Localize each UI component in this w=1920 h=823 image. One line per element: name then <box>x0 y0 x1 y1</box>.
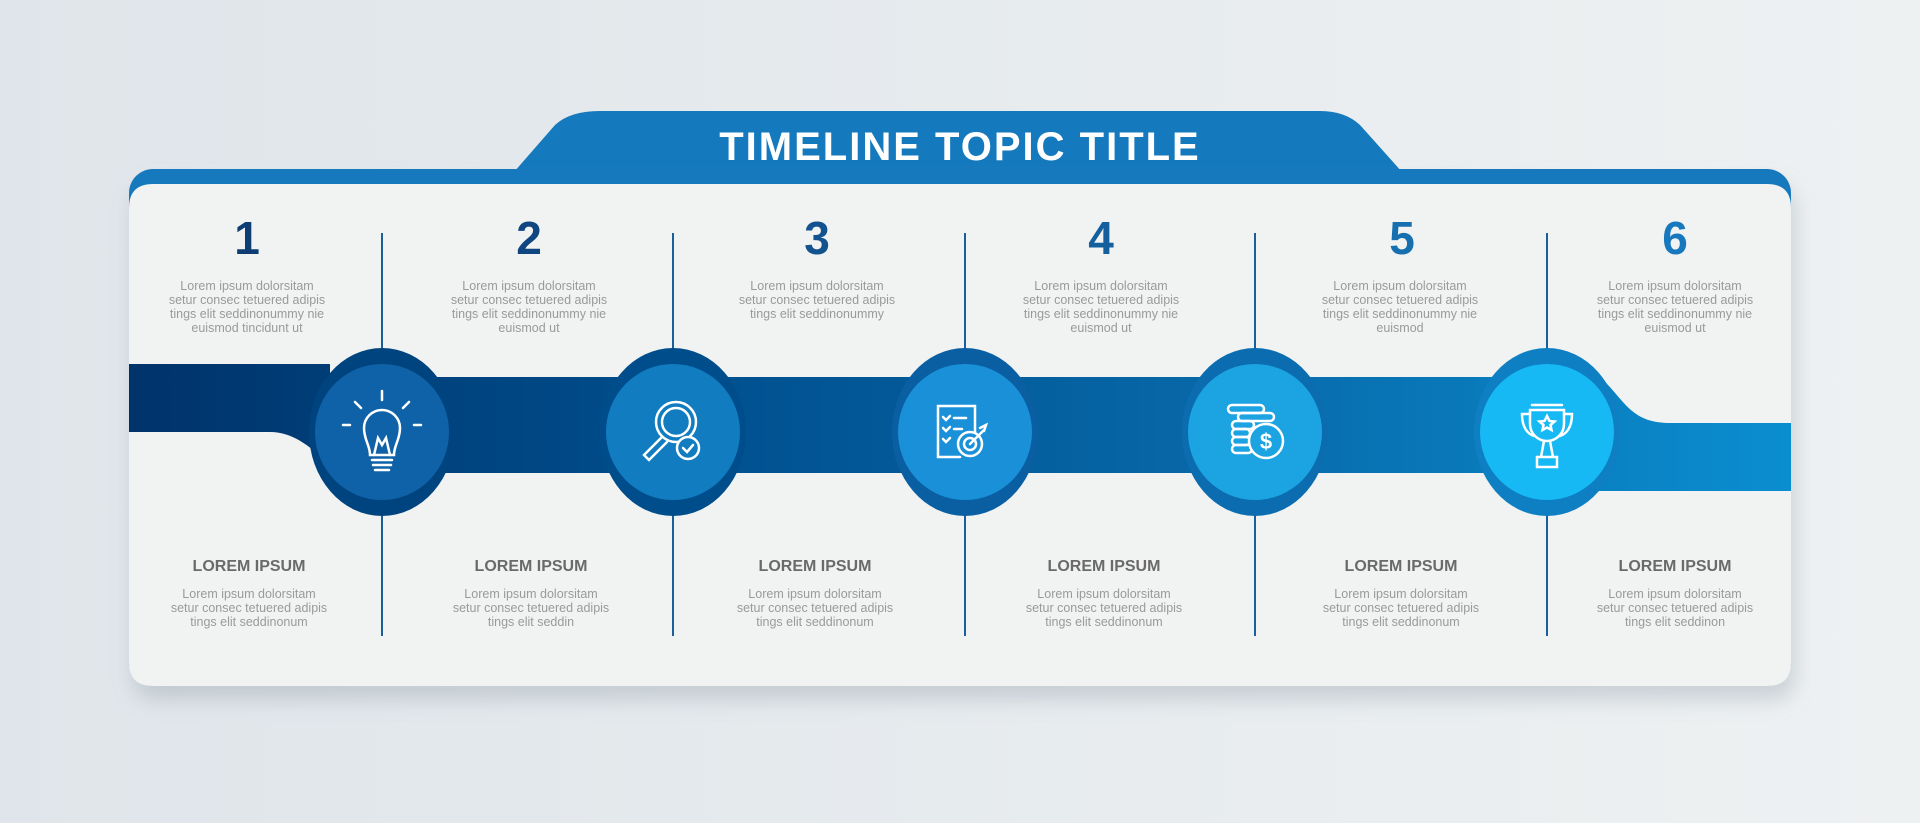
bottom paragraphs: setur consec tetuered adipis <box>1026 601 1182 615</box>
top paragraphs: Lorem ipsum dolorsitam <box>1608 279 1742 293</box>
bottom paragraphs: tings elit seddinonum <box>190 615 308 629</box>
top paragraphs: euismod <box>1376 321 1424 335</box>
top paragraphs: Lorem ipsum dolorsitam <box>1034 279 1168 293</box>
top paragraphs: Lorem ipsum dolorsitam <box>1333 279 1467 293</box>
numbers: 2 <box>516 212 542 264</box>
bottom paragraphs: setur consec tetuered adipis <box>1597 601 1753 615</box>
icon: magnifier check <box>644 402 699 460</box>
step 5 circle: trophy <box>1474 348 1620 516</box>
bottom headings: LOREM IPSUM <box>475 558 587 575</box>
numbers <box>234 212 1688 264</box>
top paragraphs: euismod ut <box>1644 321 1706 335</box>
card <box>129 169 1791 686</box>
bottom headings: LOREM IPSUM <box>1619 558 1731 575</box>
top paragraphs: Lorem ipsum dolorsitam <box>750 279 884 293</box>
icon: coins <box>1228 405 1283 458</box>
bottom headings: LOREM IPSUM <box>759 558 871 575</box>
top paragraphs: tings elit seddinonummy <box>750 307 885 321</box>
bottom paragraphs: tings elit seddinonum <box>1342 615 1460 629</box>
icon: checklist target <box>938 406 986 457</box>
top paragraphs: tings elit seddinonummy nie <box>452 307 606 321</box>
top paragraphs: setur consec tetuered adipis <box>1023 293 1179 307</box>
top paragraphs: setur consec tetuered adipis <box>451 293 607 307</box>
icon: trophy <box>1522 405 1572 467</box>
top paragraphs: setur consec tetuered adipis <box>739 293 895 307</box>
icon: lightbulb <box>343 391 421 470</box>
top paragraphs: Lorem ipsum dolorsitam <box>462 279 596 293</box>
bottom headings: LOREM IPSUM <box>1345 558 1457 575</box>
bottom paragraphs: Lorem ipsum dolorsitam <box>748 587 882 601</box>
top paragraphs: tings elit seddinonummy nie <box>1598 307 1752 321</box>
top paragraphs: euismod ut <box>498 321 560 335</box>
top paragraphs: tings elit seddinonummy nie <box>170 307 324 321</box>
top paragraphs: setur consec tetuered adipis <box>1322 293 1478 307</box>
bottom headings <box>193 558 1731 575</box>
numbers: 5 <box>1389 212 1415 264</box>
top paragraphs: tings elit seddinonummy nie <box>1024 307 1178 321</box>
numbers: 3 <box>804 212 830 264</box>
bottom headings: LOREM IPSUM <box>193 558 305 575</box>
bottom paragraphs: Lorem ipsum dolorsitam <box>1608 587 1742 601</box>
step 3 circle: checklist target <box>892 348 1038 516</box>
top paragraphs: euismod tincidunt ut <box>191 321 303 335</box>
bottom paragraphs: Lorem ipsum dolorsitam <box>464 587 598 601</box>
bottom paragraphs: setur consec tetuered adipis <box>737 601 893 615</box>
bottom paragraphs: setur consec tetuered adipis <box>1323 601 1479 615</box>
numbers: 6 <box>1662 212 1688 264</box>
icon: coins: $ <box>1260 429 1272 454</box>
top paragraphs: tings elit seddinonummy nie <box>1323 307 1477 321</box>
bottom paragraphs: Lorem ipsum dolorsitam <box>1334 587 1468 601</box>
bottom paragraphs <box>171 587 1753 629</box>
top paragraphs <box>169 279 1753 335</box>
title: TIMELINE TOPIC TITLE <box>719 125 1201 169</box>
top paragraphs: setur consec tetuered adipis <box>1597 293 1753 307</box>
bottom paragraphs: setur consec tetuered adipis <box>171 601 327 615</box>
bottom paragraphs: tings elit seddinonum <box>1045 615 1163 629</box>
numbers: 4 <box>1088 212 1114 264</box>
step 1 circle: lightbulb <box>309 348 455 516</box>
bottom paragraphs: tings elit seddinonum <box>756 615 874 629</box>
step 2 circle: magnifier <box>600 348 746 516</box>
title tab <box>514 111 1402 172</box>
bottom paragraphs: tings elit seddinon <box>1625 615 1725 629</box>
step 4 circle: coins <box>1182 348 1328 516</box>
numbers: 1 <box>234 212 260 264</box>
bottom paragraphs: tings elit seddin <box>488 615 574 629</box>
top paragraphs: euismod ut <box>1070 321 1132 335</box>
bottom paragraphs: Lorem ipsum dolorsitam <box>182 587 316 601</box>
top paragraphs: setur consec tetuered adipis <box>169 293 325 307</box>
vertical dividers <box>382 233 1547 636</box>
top paragraphs: Lorem ipsum dolorsitam <box>180 279 314 293</box>
bottom paragraphs: Lorem ipsum dolorsitam <box>1037 587 1171 601</box>
bottom headings: LOREM IPSUM <box>1048 558 1160 575</box>
timeline band <box>129 364 1791 500</box>
bottom paragraphs: setur consec tetuered adipis <box>453 601 609 615</box>
